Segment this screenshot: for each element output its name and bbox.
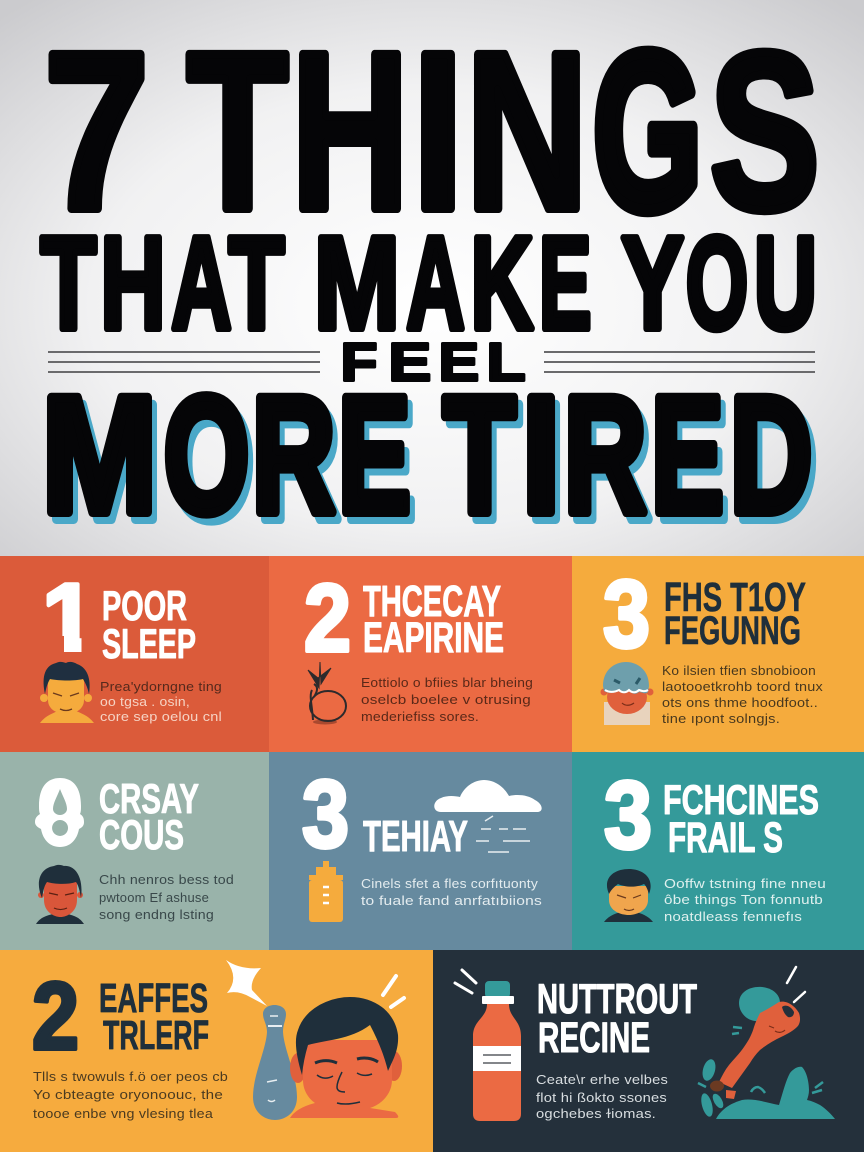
title line: 7 THINGS: G <box>593 6 702 256</box>
heading <box>664 574 806 653</box>
body text <box>664 876 826 924</box>
heading <box>99 775 199 858</box>
icon: bent arm with plants <box>698 967 835 1119</box>
number glyph <box>35 778 84 847</box>
icon: man's face with motion lines <box>290 976 404 1118</box>
heading: COUS <box>99 811 184 858</box>
heading <box>363 577 504 662</box>
heading <box>102 582 196 667</box>
heading: TEHIAY <box>363 812 468 861</box>
title line: MORE TIRED: M <box>42 363 157 548</box>
icon: plant and circle <box>308 662 346 724</box>
icon: sleeping face <box>40 662 94 723</box>
body text: ôbe things Ton fonnutb <box>664 892 823 907</box>
heading <box>99 975 209 1058</box>
panel 7 <box>0 950 433 1152</box>
title line: THAT MAKE YOU: Y <box>621 210 684 356</box>
title line: MORE TIRED: I <box>522 363 560 548</box>
number 3: 3 <box>603 561 650 668</box>
body text: ots ons thme hoodfoot.. <box>662 695 818 710</box>
title line: MORE TIRED: E <box>651 363 724 548</box>
icon: cloud and rain <box>434 780 542 852</box>
icon: star burst <box>226 960 267 1006</box>
heading: EAFFES <box>99 975 208 1021</box>
panel 8 <box>433 950 864 1152</box>
title line: MORE TIRED: D <box>730 363 812 548</box>
title line: THAT MAKE YOU: H <box>100 210 166 356</box>
body text: laotooetkrohb toord tnux <box>662 679 823 694</box>
body text <box>99 872 234 922</box>
number 3: 3 <box>302 761 349 868</box>
body text: oselcb boelee v otrusing <box>361 692 531 707</box>
body text: Eottiolo o bfiies blar bheing <box>361 675 533 690</box>
icon: blue bottle <box>253 1005 297 1120</box>
body text: Ceate\r erhe velbes <box>536 1072 668 1087</box>
title line: MORE TIRED: T <box>443 363 516 548</box>
title word: FEEL: F <box>341 332 377 392</box>
body text <box>536 1072 668 1121</box>
body text: Ko ilsien tfien sbnobioon <box>662 663 816 678</box>
title line: THAT MAKE YOU: E <box>539 210 592 356</box>
body text: song endng lsting <box>99 907 214 922</box>
heading: FEGUNNG <box>664 609 801 653</box>
title line: MORE TIRED: R <box>564 363 647 548</box>
title line: 7 THINGS: S <box>710 6 820 256</box>
body text: Ooffw tstning fine nneu <box>664 876 826 891</box>
heading <box>663 776 819 862</box>
body text <box>361 876 542 908</box>
body text: pwtoom Ef ashuse <box>99 890 209 905</box>
icon: man with dark shirt <box>36 865 84 924</box>
body text: Prea'ydorngne ting <box>100 679 222 694</box>
body text: toooe enbe vng vlesing tlea <box>33 1106 214 1121</box>
panel 4 <box>0 752 269 950</box>
body text: mederiefiss sores. <box>361 709 479 724</box>
panel 3 <box>572 556 864 752</box>
title word: FEEL: E <box>439 332 479 392</box>
body text: noatdleass fennıefıs <box>664 909 802 924</box>
title line: MORE TIRED: E <box>338 363 411 548</box>
body text: Tlls s twowuls f.ö oer peos cb <box>33 1069 228 1084</box>
body text: tine ıpont solngjs. <box>662 711 780 726</box>
heading: RECINE <box>538 1014 650 1062</box>
panel 6 <box>572 752 864 950</box>
title word: FEEL: L <box>486 332 526 392</box>
heading: EAPIRINE <box>363 614 504 662</box>
body text <box>662 663 823 726</box>
title line: MORE TIRED: R <box>252 363 336 548</box>
body text: ogchebes ɫiomas. <box>536 1106 656 1121</box>
heading: TRLERF <box>103 1012 209 1058</box>
title line: THAT MAKE YOU: U <box>754 210 817 356</box>
heading: THCECAY <box>363 577 501 626</box>
panel 2 <box>269 556 572 752</box>
title line: THAT MAKE YOU: M <box>314 210 400 356</box>
panel 1: poor sleep <box>0 556 269 752</box>
heading <box>537 975 697 1062</box>
body text: core sep oelou cnl <box>100 709 222 724</box>
body text: Cinels sfet a fles corfıtuonty <box>361 876 538 891</box>
body text: oo tgsa . osin, <box>100 694 190 709</box>
number 2: 2 <box>304 565 351 672</box>
body text <box>33 1069 228 1121</box>
heading: NUTTROUT <box>537 975 697 1022</box>
heading: FRAIL S <box>668 814 783 862</box>
number cutouts <box>52 789 68 836</box>
body text <box>100 679 222 724</box>
title line: 7 THINGS: 7 <box>44 6 149 256</box>
title line: MORE TIRED: O <box>164 363 250 548</box>
heading: SLEEP <box>102 620 196 667</box>
title line: THAT MAKE YOU: O <box>686 210 748 356</box>
heading: POOR <box>102 582 187 629</box>
number 2: 2 <box>32 963 79 1070</box>
icon: orange bottle <box>455 970 521 1121</box>
title line: THAT MAKE YOU: K <box>470 210 533 356</box>
icon: bottle <box>309 861 343 922</box>
body text: Yo cbteagte oryonoouc, the <box>33 1087 223 1102</box>
body text <box>361 675 533 724</box>
title word: FEEL: E <box>388 332 431 392</box>
icon: boy with dark hair <box>604 869 653 922</box>
title line: 7 THINGS: H <box>291 6 409 256</box>
icon: older face <box>600 662 654 725</box>
body text: to fuale fand anrfatıbiions <box>361 893 542 908</box>
title line: THAT MAKE YOU: T <box>40 210 96 356</box>
body text: Chh nenros bess tod <box>99 872 234 887</box>
body text: flot hi ßokto ssones <box>536 1090 667 1105</box>
title line: 7 THINGS: N <box>466 6 588 256</box>
panel 5 <box>269 752 572 950</box>
title line: THAT MAKE YOU: T <box>228 210 284 356</box>
title line: THAT MAKE YOU: A <box>171 210 232 356</box>
title line: THAT MAKE YOU: A <box>406 210 465 356</box>
number 3: 3 <box>604 762 652 869</box>
header panel <box>0 0 864 556</box>
heading: FHS T1OY <box>664 574 806 620</box>
title line: 7 THINGS: T <box>187 6 288 256</box>
title line: 7 THINGS: I <box>412 6 464 256</box>
heading: CRSAY <box>99 775 199 822</box>
number 1: 1 <box>42 564 95 671</box>
